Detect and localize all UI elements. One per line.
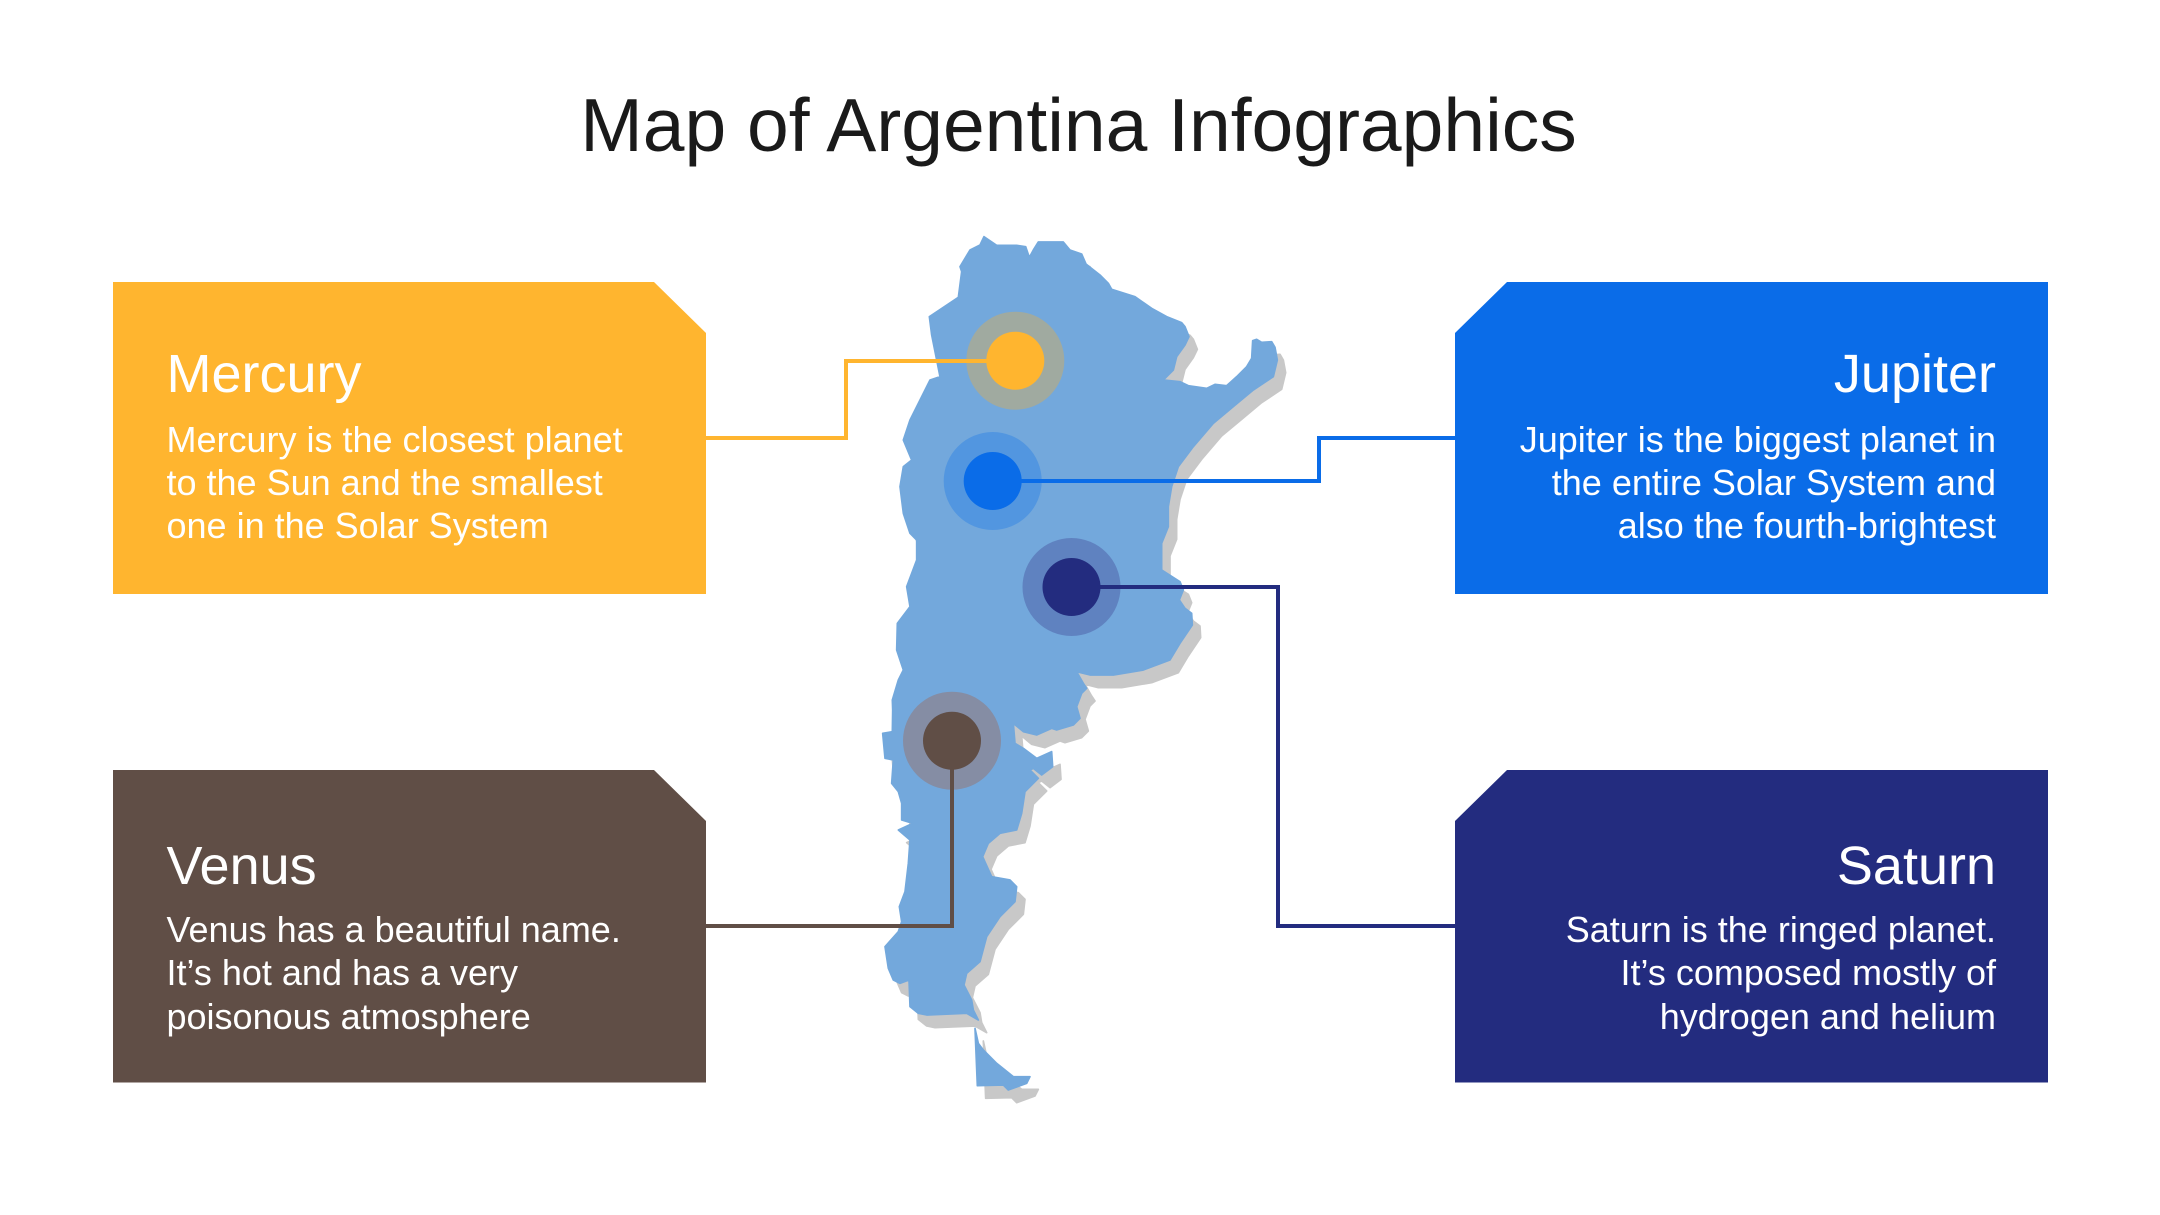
marker ring: Saturn <box>1022 538 1120 636</box>
text: Mercury description <box>166 419 623 546</box>
text: Mercury description: Mercury is the closest planet <box>166 419 623 460</box>
text: Mercury description: to the Sun and the smallest <box>166 462 603 503</box>
connector: Saturn <box>1071 587 1455 926</box>
text: Saturn description: hydrogen and helium <box>1660 996 1996 1037</box>
heading: Jupiter: Jupiter <box>1834 344 1996 404</box>
map of Argentina <box>883 237 1286 1103</box>
text: Jupiter description: the entire Solar System and <box>1552 462 1996 503</box>
text: Jupiter description: Jupiter is the biggest planet in <box>1520 419 1996 460</box>
text: Venus description <box>166 909 621 1037</box>
heading: Saturn: Saturn <box>1837 836 1996 896</box>
text: Venus description: It’s hot and has a very <box>166 952 518 993</box>
marker ring: Venus <box>903 692 1001 790</box>
map shadow <box>891 249 1286 1103</box>
marker dot: Venus <box>923 712 981 770</box>
marker ring: Mercury <box>966 312 1064 410</box>
text: Venus description: poisonous atmosphere <box>166 996 531 1037</box>
connector: Jupiter <box>993 438 1455 481</box>
map landmass <box>883 237 1277 1090</box>
panel: Venus <box>113 770 706 1082</box>
text: Saturn description: It’s composed mostly of <box>1620 952 1997 993</box>
marker dot: Saturn <box>1042 558 1100 616</box>
heading: Mercury: Mercury <box>166 344 362 404</box>
panel: Mercury <box>113 282 706 594</box>
text: Jupiter description: also the fourth-brightest <box>1618 505 1996 546</box>
title: Map of Argentina Infographics <box>580 83 1577 167</box>
panel: Jupiter <box>1455 282 2048 594</box>
marker dot: Jupiter <box>964 452 1022 510</box>
text: Saturn description: Saturn is the ringed planet. <box>1566 909 1996 950</box>
connector: Mercury <box>706 361 1015 438</box>
connector: Venus <box>706 741 952 926</box>
heading: Venus: Venus <box>166 836 317 896</box>
text: Saturn description <box>1566 909 1997 1037</box>
marker ring: Jupiter <box>944 432 1042 530</box>
marker dot: Mercury <box>986 332 1044 390</box>
text: Venus description: Venus has a beautiful name. <box>166 909 621 950</box>
text: Mercury description: one in the Solar System <box>166 505 549 546</box>
panel: Saturn <box>1455 770 2048 1082</box>
text: Jupiter description <box>1520 419 1996 546</box>
